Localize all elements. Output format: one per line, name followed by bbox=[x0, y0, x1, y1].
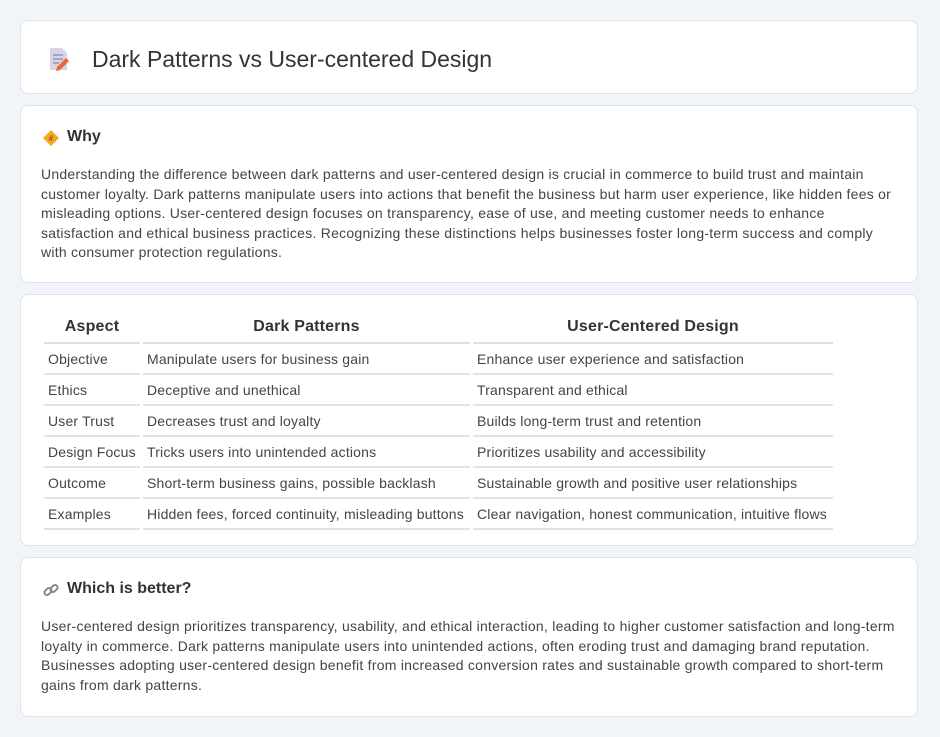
table: Enhance user experience and satisfaction bbox=[477, 350, 744, 366]
table: Examples bbox=[48, 506, 111, 522]
table: Dark Patterns bbox=[253, 318, 360, 335]
table: Ethics bbox=[48, 382, 87, 398]
table: Builds long-term trust and retention bbox=[477, 412, 701, 428]
icon: link bbox=[43, 584, 58, 596]
table: Sustainable growth and positive user relationships bbox=[477, 474, 797, 490]
table: Manipulate users for business gain bbox=[147, 350, 369, 366]
panel: why bbox=[20, 105, 918, 283]
table bbox=[44, 318, 833, 530]
title: Dark Patterns vs User-centered Design bbox=[92, 46, 492, 72]
icon: diamond bbox=[43, 130, 59, 146]
table: Decreases trust and loyalty bbox=[147, 412, 321, 428]
heading: why: Why bbox=[67, 128, 101, 145]
panel: comparison table bbox=[20, 294, 918, 546]
table: Hidden fees, forced continuity, misleading buttons bbox=[147, 506, 464, 522]
table: Short-term business gains, possible backlash bbox=[147, 474, 436, 490]
table: Deceptive and unethical bbox=[147, 382, 301, 398]
text block: which is better: User-centered design prioritizes transparency, usability, and ethical interaction, leading to higher customer satisfaction and long-term loyalty in commerce. Dark patterns manipulate users into unintended actions, often eroding trust and damaging brand reputation. Businesses adopting user-centered design benefit from increased conversion rates and sustainable growth compared to short-term gains from dark patterns. bbox=[41, 618, 895, 693]
table: Tricks users into unintended actions bbox=[147, 444, 376, 460]
table: Transparent and ethical bbox=[477, 382, 628, 398]
text block: why: Understanding the difference between dark patterns and user-centered design is crucial in commerce to build trust and maintain customer loyalty. Dark patterns manipulate users into actions that benefit the business but harm user experience, like hidden fees or misleading options. User-centered design focuses on transparency, ease of use, and meeting customer needs to enhance satisfaction and ethical business practices. Recognizing these distinctions helps businesses foster long-term success and comply with consumer protection regulations. bbox=[41, 166, 891, 260]
table: Outcome bbox=[48, 474, 106, 490]
icon: diamond: # bbox=[49, 134, 54, 143]
table: Aspect bbox=[65, 318, 119, 335]
header card bbox=[20, 20, 918, 94]
table: Design Focus bbox=[48, 444, 136, 460]
heading: which is better: Which is better? bbox=[67, 580, 191, 597]
panel: which is better bbox=[20, 557, 918, 717]
table: User Trust bbox=[48, 412, 114, 428]
table: Prioritizes usability and accessibility bbox=[477, 444, 706, 460]
icon: document pencil bbox=[50, 48, 69, 71]
table: User-Centered Design bbox=[567, 318, 739, 335]
table: Objective bbox=[48, 350, 108, 366]
table: Clear navigation, honest communication, intuitive flows bbox=[477, 506, 827, 522]
